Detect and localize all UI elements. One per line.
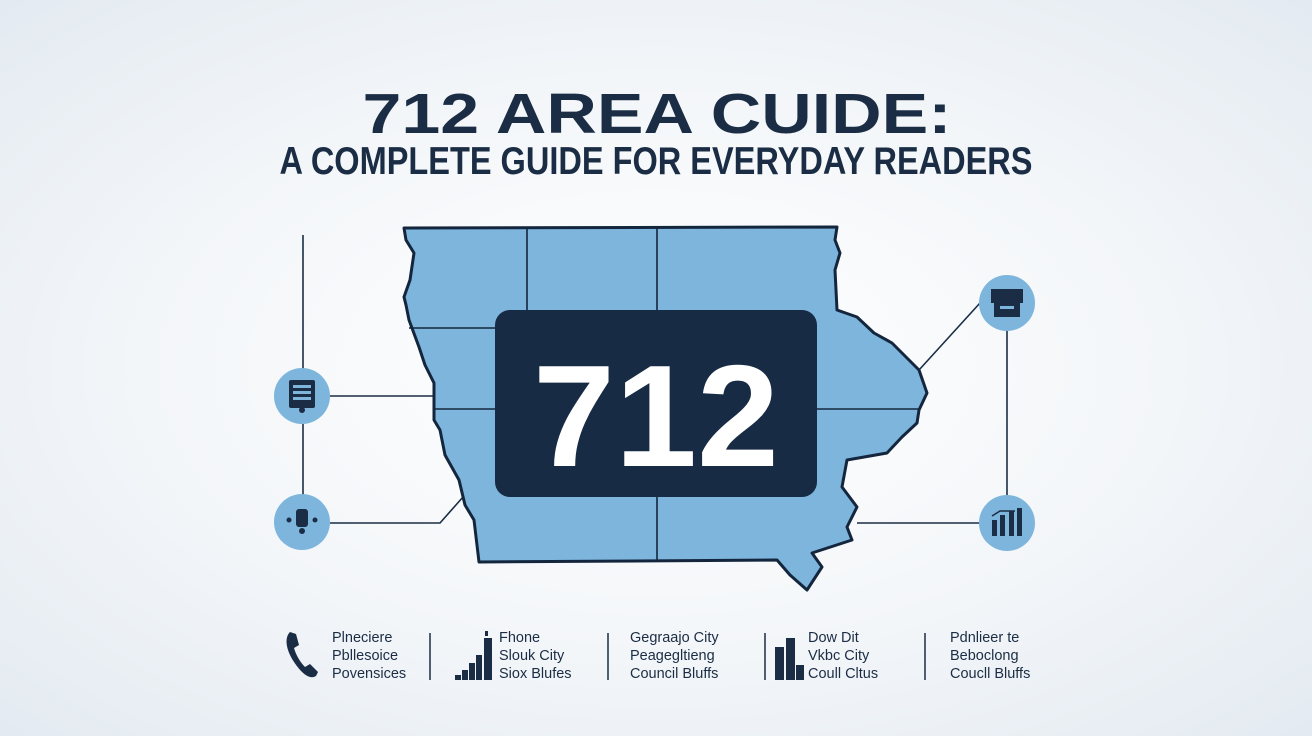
bottom info row: Beboclong: [950, 648, 1019, 664]
bottom info row: Coucll Bluffs: [950, 666, 1030, 682]
712 badge: 712: [533, 335, 779, 497]
subtitle: A COMPLETE GUIDE FOR EVERYDAY READERS: [280, 140, 1032, 183]
title: 712 AREA CUIDE:: [362, 82, 952, 146]
bottom info row: Vkbc City: [808, 648, 870, 664]
icon: pin: [274, 494, 330, 550]
icon: bar chart: [979, 495, 1035, 551]
icon: stairs chart: [455, 631, 492, 680]
bottom info row: Siox Blufes: [499, 666, 572, 682]
connector lines: [303, 235, 1007, 523]
bottom info row: Peagegltieng: [630, 648, 715, 664]
bottom info row: Pdnlieer te: [950, 630, 1019, 646]
bottom info row: [287, 630, 1030, 682]
map of Iowa: [404, 227, 927, 590]
icon: document: [274, 368, 330, 424]
bottom info row: Gegraajo City: [630, 630, 719, 646]
bottom info row: Council Bluffs: [630, 666, 718, 682]
icon: phone: [287, 632, 318, 677]
bottom info row: Pbllesoice: [332, 648, 398, 664]
icon: buildings: [775, 638, 804, 680]
bottom info row: Fhone: [499, 630, 540, 646]
bottom info row: Slouk City: [499, 648, 565, 664]
bottom info row: Plneciere: [332, 630, 392, 646]
icon: printer: [979, 275, 1035, 331]
712 badge: [495, 310, 817, 497]
bottom info row: Dow Dit: [808, 630, 859, 646]
bottom info row: Coull Cltus: [808, 666, 878, 682]
bottom info row: Povensices: [332, 666, 406, 682]
